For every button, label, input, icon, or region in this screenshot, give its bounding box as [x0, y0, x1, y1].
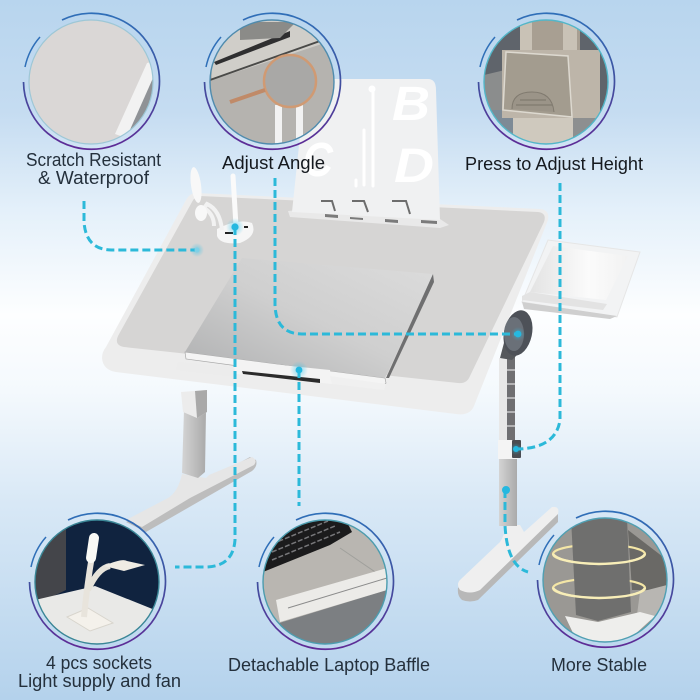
ring accent: [539, 535, 554, 565]
ring: [258, 513, 393, 649]
photo: height button: [484, 20, 610, 146]
ring accent: [206, 37, 221, 67]
label: more stable: More Stable: [551, 655, 647, 675]
photo: baffle close-up: [263, 518, 387, 650]
ring: [478, 13, 614, 149]
connector: scratch surface: [84, 201, 197, 250]
usb socket hub with lamp and fan: [189, 166, 254, 243]
connector: adjust angle: [275, 178, 518, 334]
label: sockets: Light supply and fan: [18, 671, 181, 691]
connector: stable foot: [505, 490, 528, 572]
panel: adjust angle: [204, 13, 340, 149]
side drawer: [522, 240, 640, 319]
panel: more stable: [538, 511, 673, 648]
photo: knob close-up: [210, 20, 334, 145]
ring accent: [25, 37, 40, 67]
ring: [30, 513, 165, 649]
connector: baffle: [298, 370, 300, 506]
book stand: [288, 78, 449, 228]
ring accent: [31, 537, 46, 567]
ring accent: [259, 537, 274, 567]
laptop: [185, 258, 434, 385]
label: sockets: [18, 653, 181, 691]
ring: [204, 13, 340, 149]
label: scratch resistant: & Waterproof: [38, 168, 150, 188]
label: scratch resistant: [26, 150, 161, 188]
label: press to adjust height: Press to Adjust Height: [465, 154, 643, 174]
panel: scratch resistant: [24, 13, 160, 150]
left leg: [126, 390, 256, 532]
panel: press to adjust height: [478, 13, 614, 149]
desk top white frame: [102, 193, 548, 414]
desk illustration: [102, 78, 640, 602]
photo: leg column with rings: [543, 518, 667, 648]
label: scratch resistant: Scratch Resistant: [26, 150, 161, 170]
book stand: B: [392, 78, 430, 131]
label: sockets: 4 pcs sockets: [46, 653, 152, 673]
connector: height button: [518, 183, 560, 449]
panel: sockets: [30, 513, 165, 650]
book stand: D: [394, 140, 434, 193]
label: laptop baffle: Detachable Laptop Baffle: [228, 655, 430, 675]
label: adjust angle: Adjust Angle: [222, 153, 325, 173]
photo: lamp and fan: [35, 520, 160, 650]
dashed callout connectors: [84, 178, 560, 572]
ring accent: [480, 37, 495, 67]
callout dots: [190, 218, 525, 494]
photo: desk surface: [30, 20, 152, 144]
ring: [24, 13, 159, 149]
detachable baffle: [176, 360, 386, 390]
panel: laptop baffle: [258, 513, 393, 650]
connector: sockets: [175, 227, 235, 567]
book stand: C: [303, 134, 334, 187]
right leg: [458, 354, 558, 602]
angle-adjust knob: [500, 308, 536, 360]
desk top grey surface: [117, 196, 545, 383]
ring: [538, 511, 673, 647]
